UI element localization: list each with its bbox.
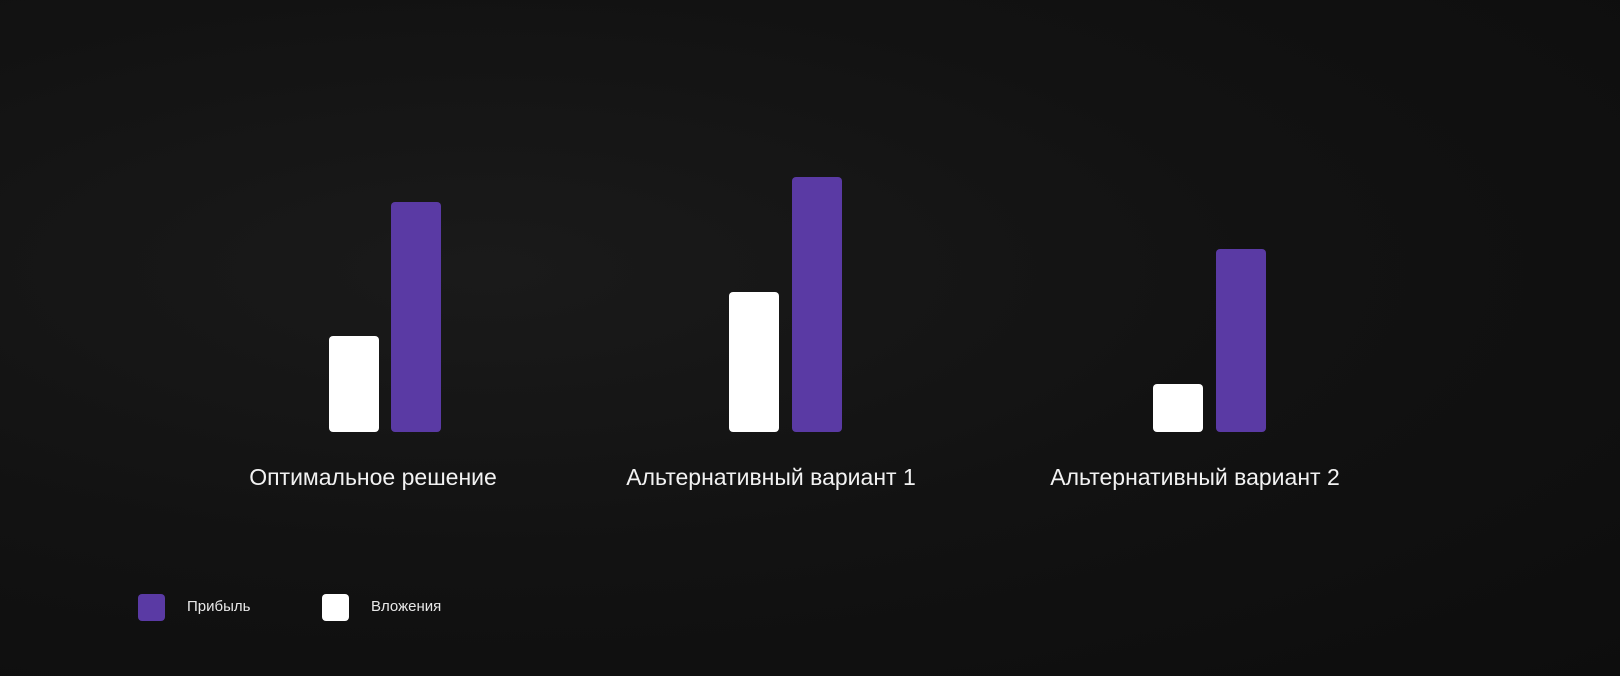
group: Альтернативный вариант 2 <box>1050 249 1340 490</box>
bar: прибыль 2 <box>792 177 842 432</box>
group: Оптимальное решение <box>249 202 497 490</box>
bar: вложения 3 <box>1153 384 1203 432</box>
group: Альтернативный вариант 1 <box>626 177 916 490</box>
label 3: Альтернативный вариант 2 <box>1050 464 1340 490</box>
bar: вложения 2 <box>729 292 779 432</box>
legend swatch: вложения <box>322 594 349 621</box>
bar: прибыль 1 <box>391 202 441 432</box>
legend text: прибыль: Прибыль <box>187 598 250 615</box>
bar: прибыль 3 <box>1216 249 1266 432</box>
legend text: вложения: Вложения <box>371 598 441 615</box>
bar: вложения 1 <box>329 336 379 432</box>
legend swatch: прибыль <box>138 594 165 621</box>
legend <box>138 594 441 621</box>
label 1: Оптимальное решение <box>249 464 497 490</box>
label 2: Альтернативный вариант 1 <box>626 464 916 490</box>
